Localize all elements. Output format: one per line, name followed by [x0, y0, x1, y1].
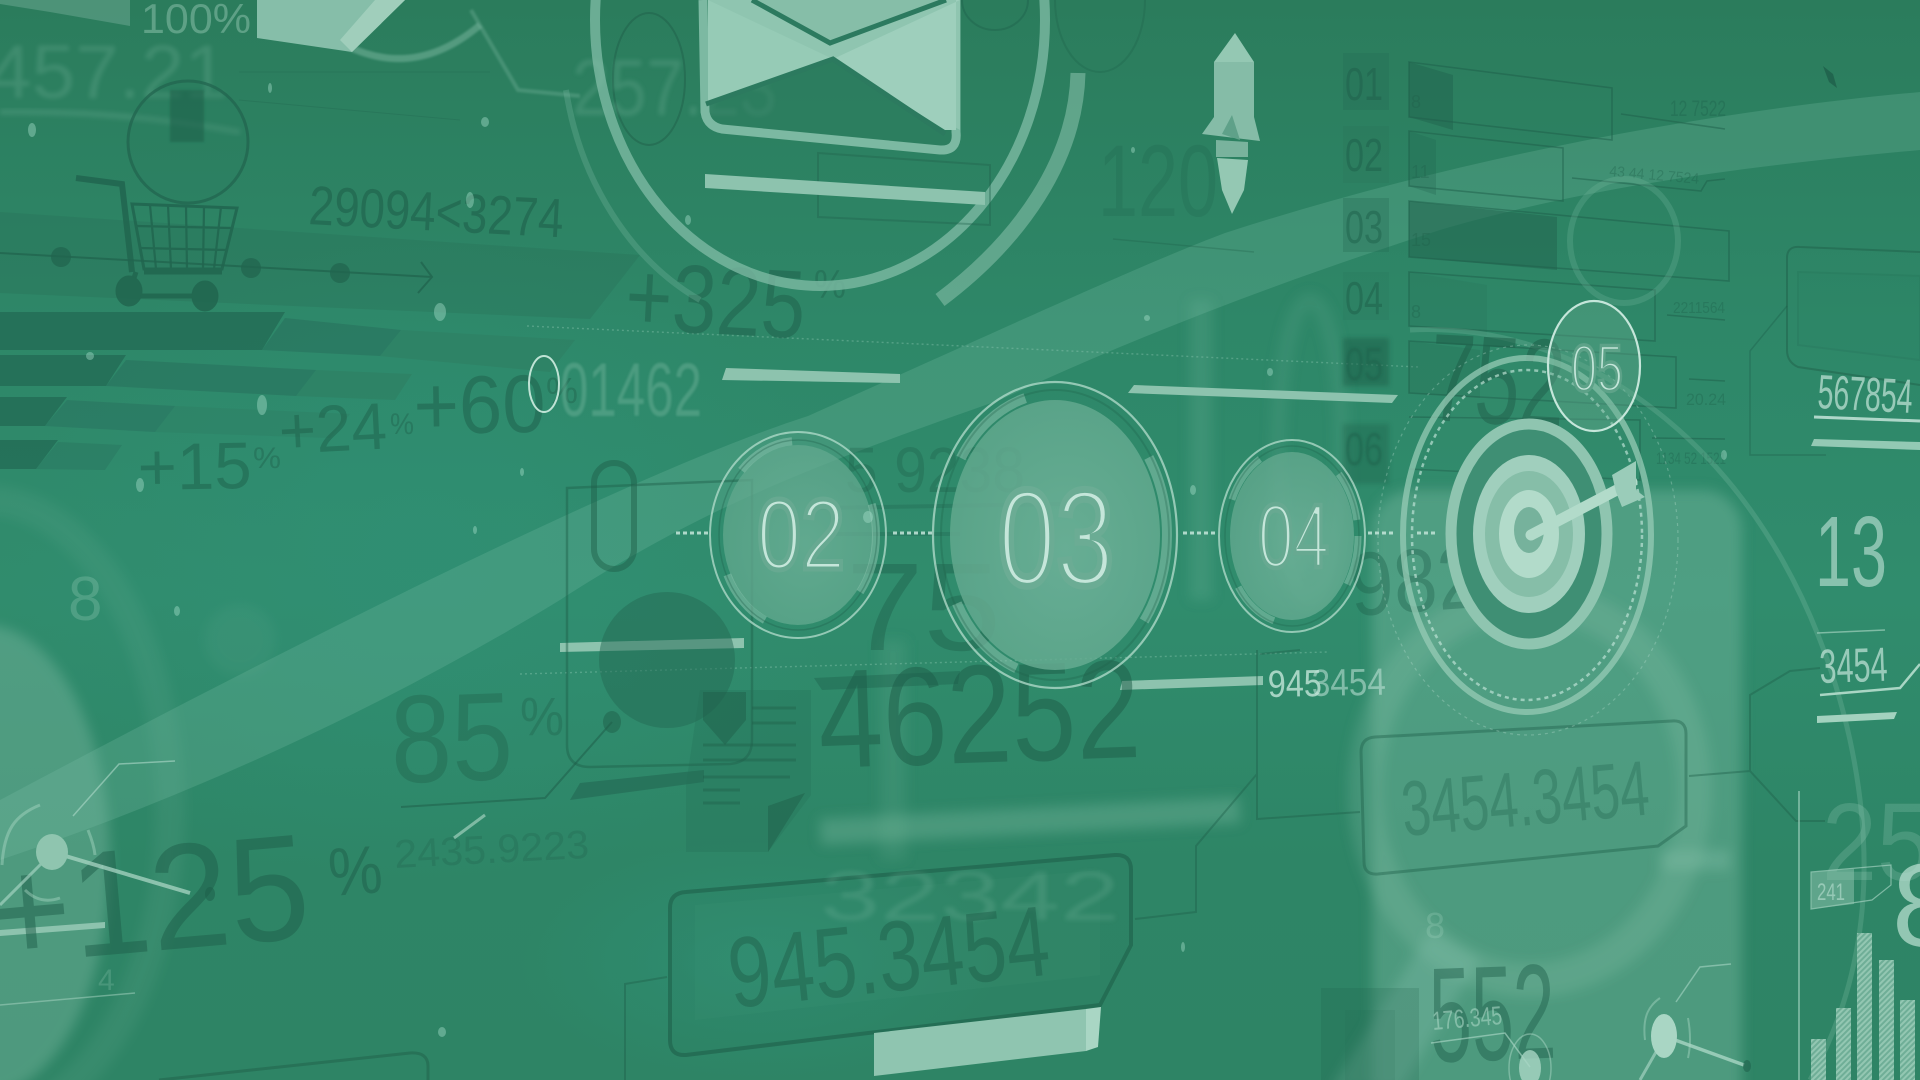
ranking table 01-06: 2211564 — [1673, 300, 1725, 317]
ranking table 01-06: 43 44 12 7524 — [1609, 163, 1700, 188]
icon: shopping cart — [76, 178, 237, 311]
ranking table 01-06: 1134 52 1521 — [1656, 449, 1726, 468]
network node left — [0, 761, 215, 1005]
icon: target with arrow — [1378, 345, 1678, 735]
left blurred dial: 8 — [68, 565, 102, 634]
number 752: 752 — [1427, 308, 1569, 454]
box 945.3454 — [670, 855, 1131, 1055]
number 552: 176.345 — [1431, 1000, 1503, 1036]
circle step 04: 04 — [1258, 487, 1329, 587]
growth percentages: % — [814, 263, 846, 307]
light value 945 3454 — [1267, 662, 1386, 706]
stat +125%: % — [326, 831, 385, 911]
value 2435.9223: 2435.9223 — [393, 823, 590, 877]
right column stats — [1811, 366, 1920, 723]
big ring around envelope — [566, 0, 1145, 300]
top right box — [1750, 247, 1920, 455]
circle step 03 — [933, 382, 1177, 688]
box 945.3454: 32342 — [820, 857, 1120, 935]
ranking table 01-06: 20.24 — [1686, 390, 1726, 409]
number 552 — [1321, 905, 1558, 1080]
growth percentages: +60 — [413, 359, 546, 452]
growth percentages — [137, 241, 846, 504]
icon: profile document — [686, 690, 811, 852]
stat 85%: 85 — [388, 667, 515, 810]
network node bottom right — [1640, 964, 1751, 1080]
dim numbers behind circles: 75 — [846, 538, 1001, 677]
circle step 03: 03 — [998, 462, 1114, 615]
badge 05: 05 — [1571, 331, 1623, 405]
number 120: 120 — [1098, 124, 1218, 238]
ranking table 01-06: 12 7522 — [1670, 96, 1726, 121]
ranking table 01-06: 11 — [1411, 162, 1430, 182]
bottom right bar chart panel: 241 — [1817, 879, 1845, 906]
stat 85%: % — [520, 687, 564, 747]
light box top-left — [257, 0, 405, 52]
icon: envelope — [703, 0, 960, 150]
big ring around envelope: 257.23 — [572, 43, 777, 132]
number 552: 8 — [1425, 905, 1445, 946]
growth percentages: % — [253, 442, 281, 475]
ranking table 01-06: 05 — [1345, 338, 1383, 390]
dotted connectors — [676, 532, 1438, 534]
circle step 02 — [710, 432, 886, 638]
ranking table 01-06: 02 — [1345, 129, 1383, 181]
blurred background: phone and magnifier — [820, 300, 1742, 1080]
growth percentages: +24 — [277, 388, 389, 468]
dark speck — [1823, 66, 1837, 88]
large light bar — [874, 1007, 1101, 1076]
bottom right bar chart panel — [1799, 781, 1920, 1080]
growth percentages: +15 — [137, 428, 252, 504]
badge 05 — [1548, 301, 1640, 431]
icon: clipboard with pie — [567, 463, 752, 800]
wide arc behind target — [1410, 330, 1864, 1080]
top-left dim numbers — [0, 0, 580, 132]
growth percentages: +325 — [623, 241, 808, 359]
number 29094<3274: 29094<3274 — [307, 174, 565, 249]
ranking table 01-06: 15 — [1411, 230, 1431, 250]
dust particles — [28, 83, 1727, 1037]
swoosh band — [0, 92, 1920, 860]
number 46252: 46252 — [816, 630, 1143, 798]
ranking table 01-06: 03 — [1345, 201, 1383, 253]
stat 85% — [388, 667, 621, 810]
dim numbers behind circles: 5 9238 — [845, 434, 1025, 506]
light value 945 3454: 945 — [1267, 663, 1322, 706]
icon: rocket — [1202, 33, 1260, 214]
dim numbers behind circles: 982.34 — [1346, 519, 1593, 636]
box 3454.3454: 3454.3454 — [1398, 744, 1653, 853]
dim ghost number — [529, 348, 702, 433]
circle step 04 — [1219, 440, 1365, 632]
box 945.3454: 945.3454 — [723, 885, 1055, 1030]
network node left: 4 — [98, 964, 115, 997]
light bars — [0, 174, 1398, 936]
ranking table 01-06: 8 — [1411, 302, 1421, 322]
ranking table 01-06: 04 — [1345, 272, 1383, 324]
arrow timeline — [0, 247, 432, 293]
growth percentages: % — [390, 408, 414, 441]
ranking table 01-06: 8 — [1411, 92, 1421, 112]
circle step 02: 02 — [757, 479, 845, 591]
light value 945 3454: 3454 — [1311, 662, 1386, 705]
ranking table 01-06: 01 — [1345, 58, 1383, 110]
ranking table 01-06: 06 — [1345, 423, 1383, 475]
lens icon — [128, 81, 248, 203]
left blurred dial — [0, 500, 276, 1080]
dim numbers behind circles — [820, 434, 1593, 677]
faint ring near table — [1570, 179, 1678, 303]
faint dotted lines — [520, 326, 1419, 674]
bottom left box outline — [159, 1053, 428, 1080]
dim ghost number: 01462 — [560, 348, 702, 433]
growth percentages: % — [546, 370, 578, 411]
ranking table 01-06 — [1343, 53, 1729, 484]
box 3454.3454 — [1361, 721, 1686, 874]
connector lines — [625, 650, 1825, 1080]
background bands — [0, 212, 640, 470]
